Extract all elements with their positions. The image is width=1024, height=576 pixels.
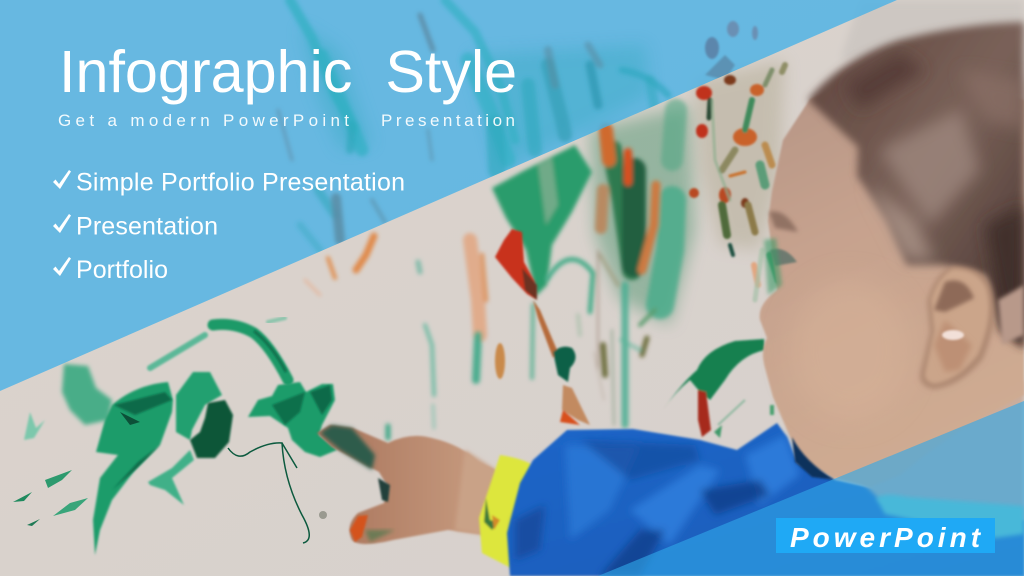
check icon: [53, 257, 71, 276]
right lobe: [248, 382, 337, 457]
cheek highlight: [790, 280, 910, 420]
teal strokes: [278, 0, 668, 250]
paint mark: red streak: [495, 229, 590, 425]
blue sleeve and smock: [507, 423, 1024, 576]
darker wall behind head: [840, 0, 1024, 60]
item: Presentation: Presentation: [76, 212, 218, 240]
paint haze behind upper right splatter: [695, 60, 785, 250]
paint haze behind central streaks: [590, 105, 695, 325]
thin paint drip: [228, 443, 309, 543]
dark green curl: [190, 400, 233, 458]
paint on thumb: [350, 515, 368, 542]
paint marks: upper right splatter: [689, 65, 785, 300]
teal paint showing through overlay: [278, 0, 668, 250]
middle green piece: [176, 372, 222, 440]
area behind ear: [998, 285, 1024, 345]
ear highlight: [942, 330, 964, 340]
badge box: [776, 518, 995, 553]
check icon: [53, 214, 71, 233]
teal haze: [470, 45, 650, 170]
specks: [319, 511, 327, 519]
paint mark: orange brown streak: [495, 343, 505, 379]
PowerPoint badge: PowerPoint: [790, 522, 984, 553]
item: Simple Portfolio Presentation: Simple Portfolio Presentation: [76, 168, 405, 196]
item: Portfolio: Portfolio: [76, 256, 168, 284]
title: Infographic Style: [59, 38, 517, 105]
paint marks: central green and orange streaks: [532, 110, 676, 425]
collar: [876, 495, 1024, 538]
blue diagonal overlay: bottom right: [598, 401, 1024, 576]
yellow cuff: [479, 455, 531, 568]
paint marks: far left orange and green smears: [305, 236, 486, 438]
hair: [808, 22, 1024, 349]
chin shadow: [792, 437, 835, 480]
blue gray splashes in overlay: [705, 21, 758, 80]
ear body: [925, 269, 989, 384]
neck: [820, 380, 1024, 520]
blue diagonal overlay: top left: [0, 0, 897, 391]
folds: [515, 435, 800, 576]
hair highlights: [845, 52, 1024, 340]
ear lobe shading: [934, 320, 972, 372]
check icon: [53, 170, 71, 189]
top swipe: [268, 318, 285, 322]
paint mark: main green swirl: [13, 318, 337, 555]
hand: [317, 425, 496, 544]
child's head: [760, 22, 1024, 538]
ear: [920, 266, 994, 389]
face and skull: [760, 60, 1024, 487]
arc: [213, 324, 288, 380]
ear inner shadow: [934, 280, 974, 312]
left green haze: [62, 364, 112, 425]
teal haze left: [303, 36, 370, 148]
lower green strokes: [148, 450, 194, 505]
faint stroke to arc: [150, 335, 205, 368]
eyebrow: [769, 211, 798, 232]
ear shadow: [920, 266, 994, 389]
centre green mass: [93, 382, 173, 555]
subtitle part two: Presentation: [381, 111, 515, 130]
green paint near eye: [764, 238, 782, 295]
hand shape: [317, 425, 496, 544]
subtitle: [58, 111, 515, 130]
smock shape: [507, 423, 1024, 576]
paint mark: right green swoosh: [663, 339, 772, 438]
paint mark: large green wash: [492, 145, 592, 296]
subtitle part one: Get a modern PowerPoint: [58, 111, 349, 130]
eye: [770, 249, 797, 266]
checklist: [53, 168, 405, 284]
wrist: [455, 450, 496, 535]
paint on finger: [320, 425, 375, 470]
